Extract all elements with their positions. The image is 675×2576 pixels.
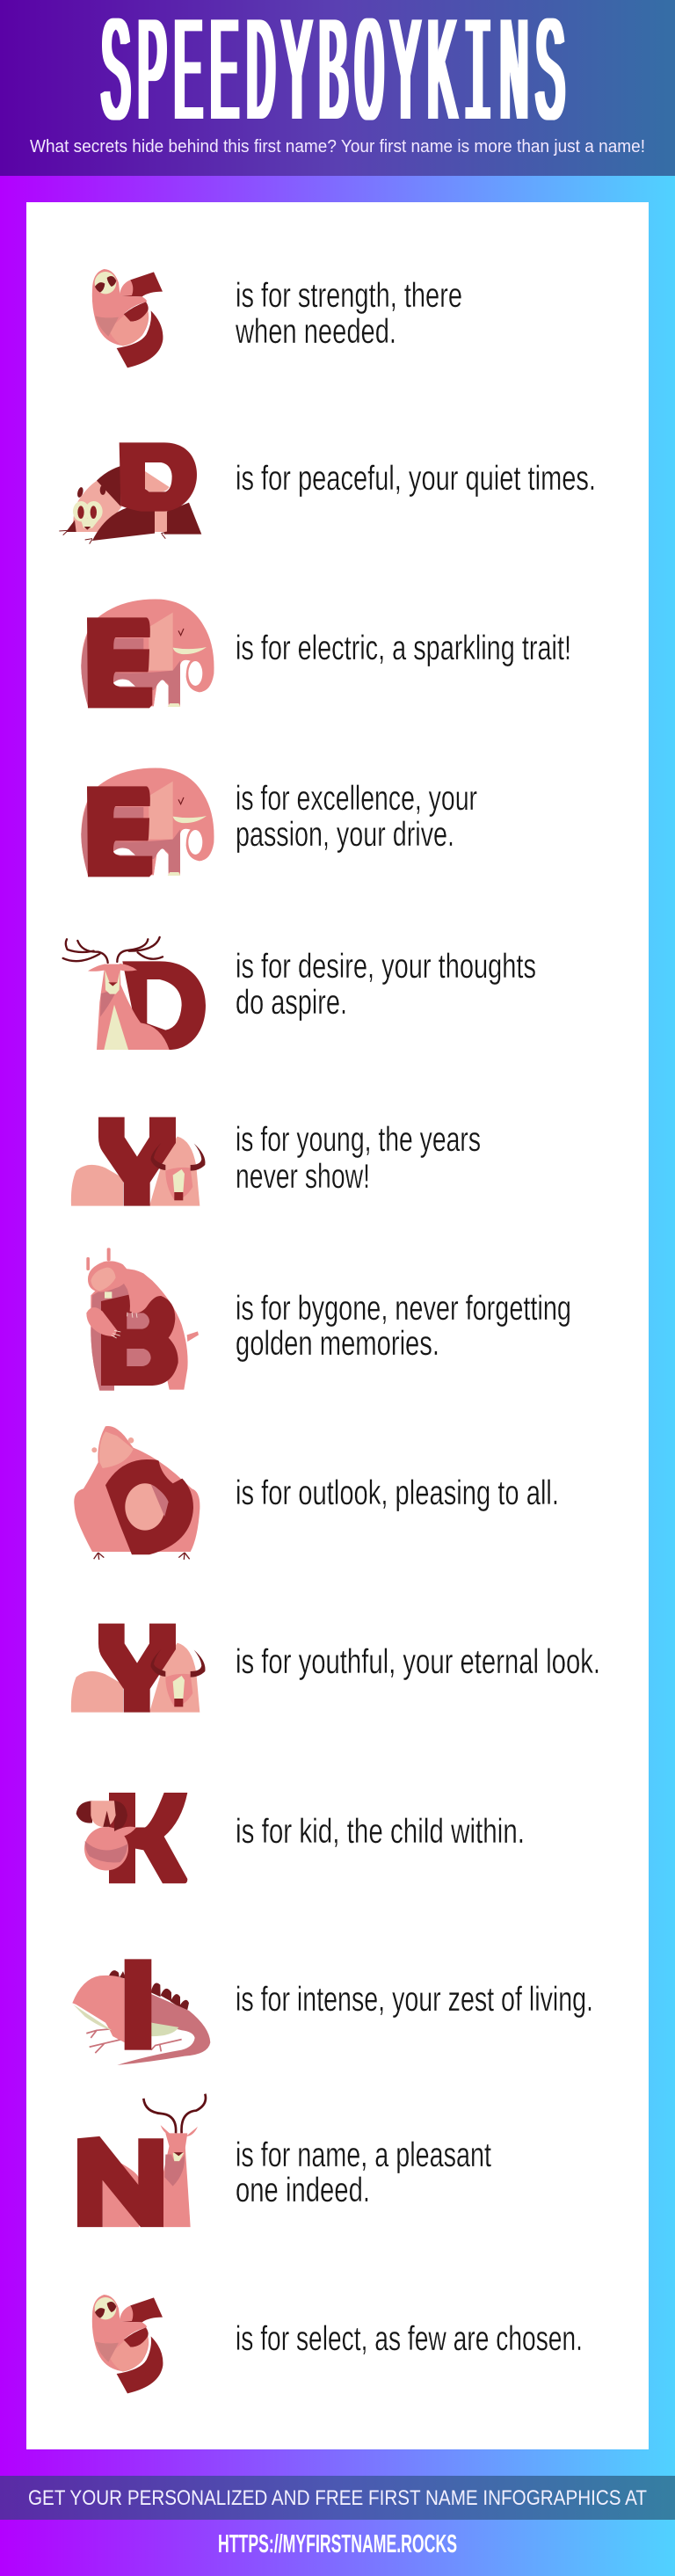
icon: deer letter D bbox=[63, 937, 206, 1050]
row Y young bbox=[71, 1117, 481, 1206]
row O outlook bbox=[74, 1426, 559, 1560]
footer banner bbox=[0, 2476, 675, 2520]
icon: beaver letter B bbox=[86, 1248, 199, 1391]
icon: iguana letter I bbox=[72, 1959, 210, 2065]
icon: mole letter O bbox=[74, 1426, 200, 1560]
icon: yak letter Y second bbox=[71, 1624, 205, 1713]
text: Y line two: never show! bbox=[236, 1158, 370, 1196]
row E excellence bbox=[81, 768, 477, 877]
icon: koala letter K bbox=[76, 1793, 187, 1883]
row R peaceful bbox=[59, 442, 596, 544]
row I intense bbox=[72, 1959, 593, 2065]
text: K line: is for kid, the child within. bbox=[236, 1813, 525, 1851]
icon: sloth letter S bbox=[92, 269, 163, 367]
text: E second line two: passion, your drive. bbox=[236, 816, 454, 854]
icon: elephant letter E bbox=[81, 600, 214, 708]
row K kid bbox=[76, 1793, 525, 1883]
subtitle: What secrets hide behind this first name? Your first name is more than just a name! bbox=[30, 136, 645, 156]
icon: raccoon letter R bbox=[59, 442, 201, 544]
text: O line: is for outlook, pleasing to all. bbox=[236, 1474, 559, 1512]
icon: antelope letter N bbox=[77, 2094, 206, 2227]
footer url: HTTPS://MYFIRSTNAME.ROCKS bbox=[218, 2530, 457, 2558]
icon: sloth letter S second bbox=[92, 2295, 163, 2393]
text: S second line: when needed. bbox=[235, 313, 396, 351]
row S strength bbox=[92, 269, 462, 367]
row D desire bbox=[63, 937, 536, 1050]
row E electric bbox=[81, 600, 571, 708]
text: E second line one: is for excellence, your bbox=[236, 780, 477, 818]
header banner bbox=[0, 0, 675, 176]
text: S line: is for strength, there bbox=[236, 277, 462, 315]
row B bygone bbox=[86, 1248, 571, 1391]
text: Y line one: is for young, the years bbox=[236, 1121, 481, 1159]
text: N line two: one indeed. bbox=[236, 2172, 370, 2209]
icon: elephant letter E second bbox=[81, 768, 214, 877]
text: B line two: golden memories. bbox=[236, 1325, 439, 1363]
row N name bbox=[77, 2094, 491, 2227]
text: D line two: do aspire. bbox=[236, 984, 347, 1022]
row Y youthful bbox=[71, 1624, 600, 1713]
text: D line one: is for desire, your thoughts bbox=[236, 948, 536, 986]
row S select bbox=[92, 2295, 583, 2393]
icon: yak letter Y bbox=[71, 1117, 205, 1206]
text: N line one: is for name, a pleasant bbox=[236, 2136, 491, 2174]
